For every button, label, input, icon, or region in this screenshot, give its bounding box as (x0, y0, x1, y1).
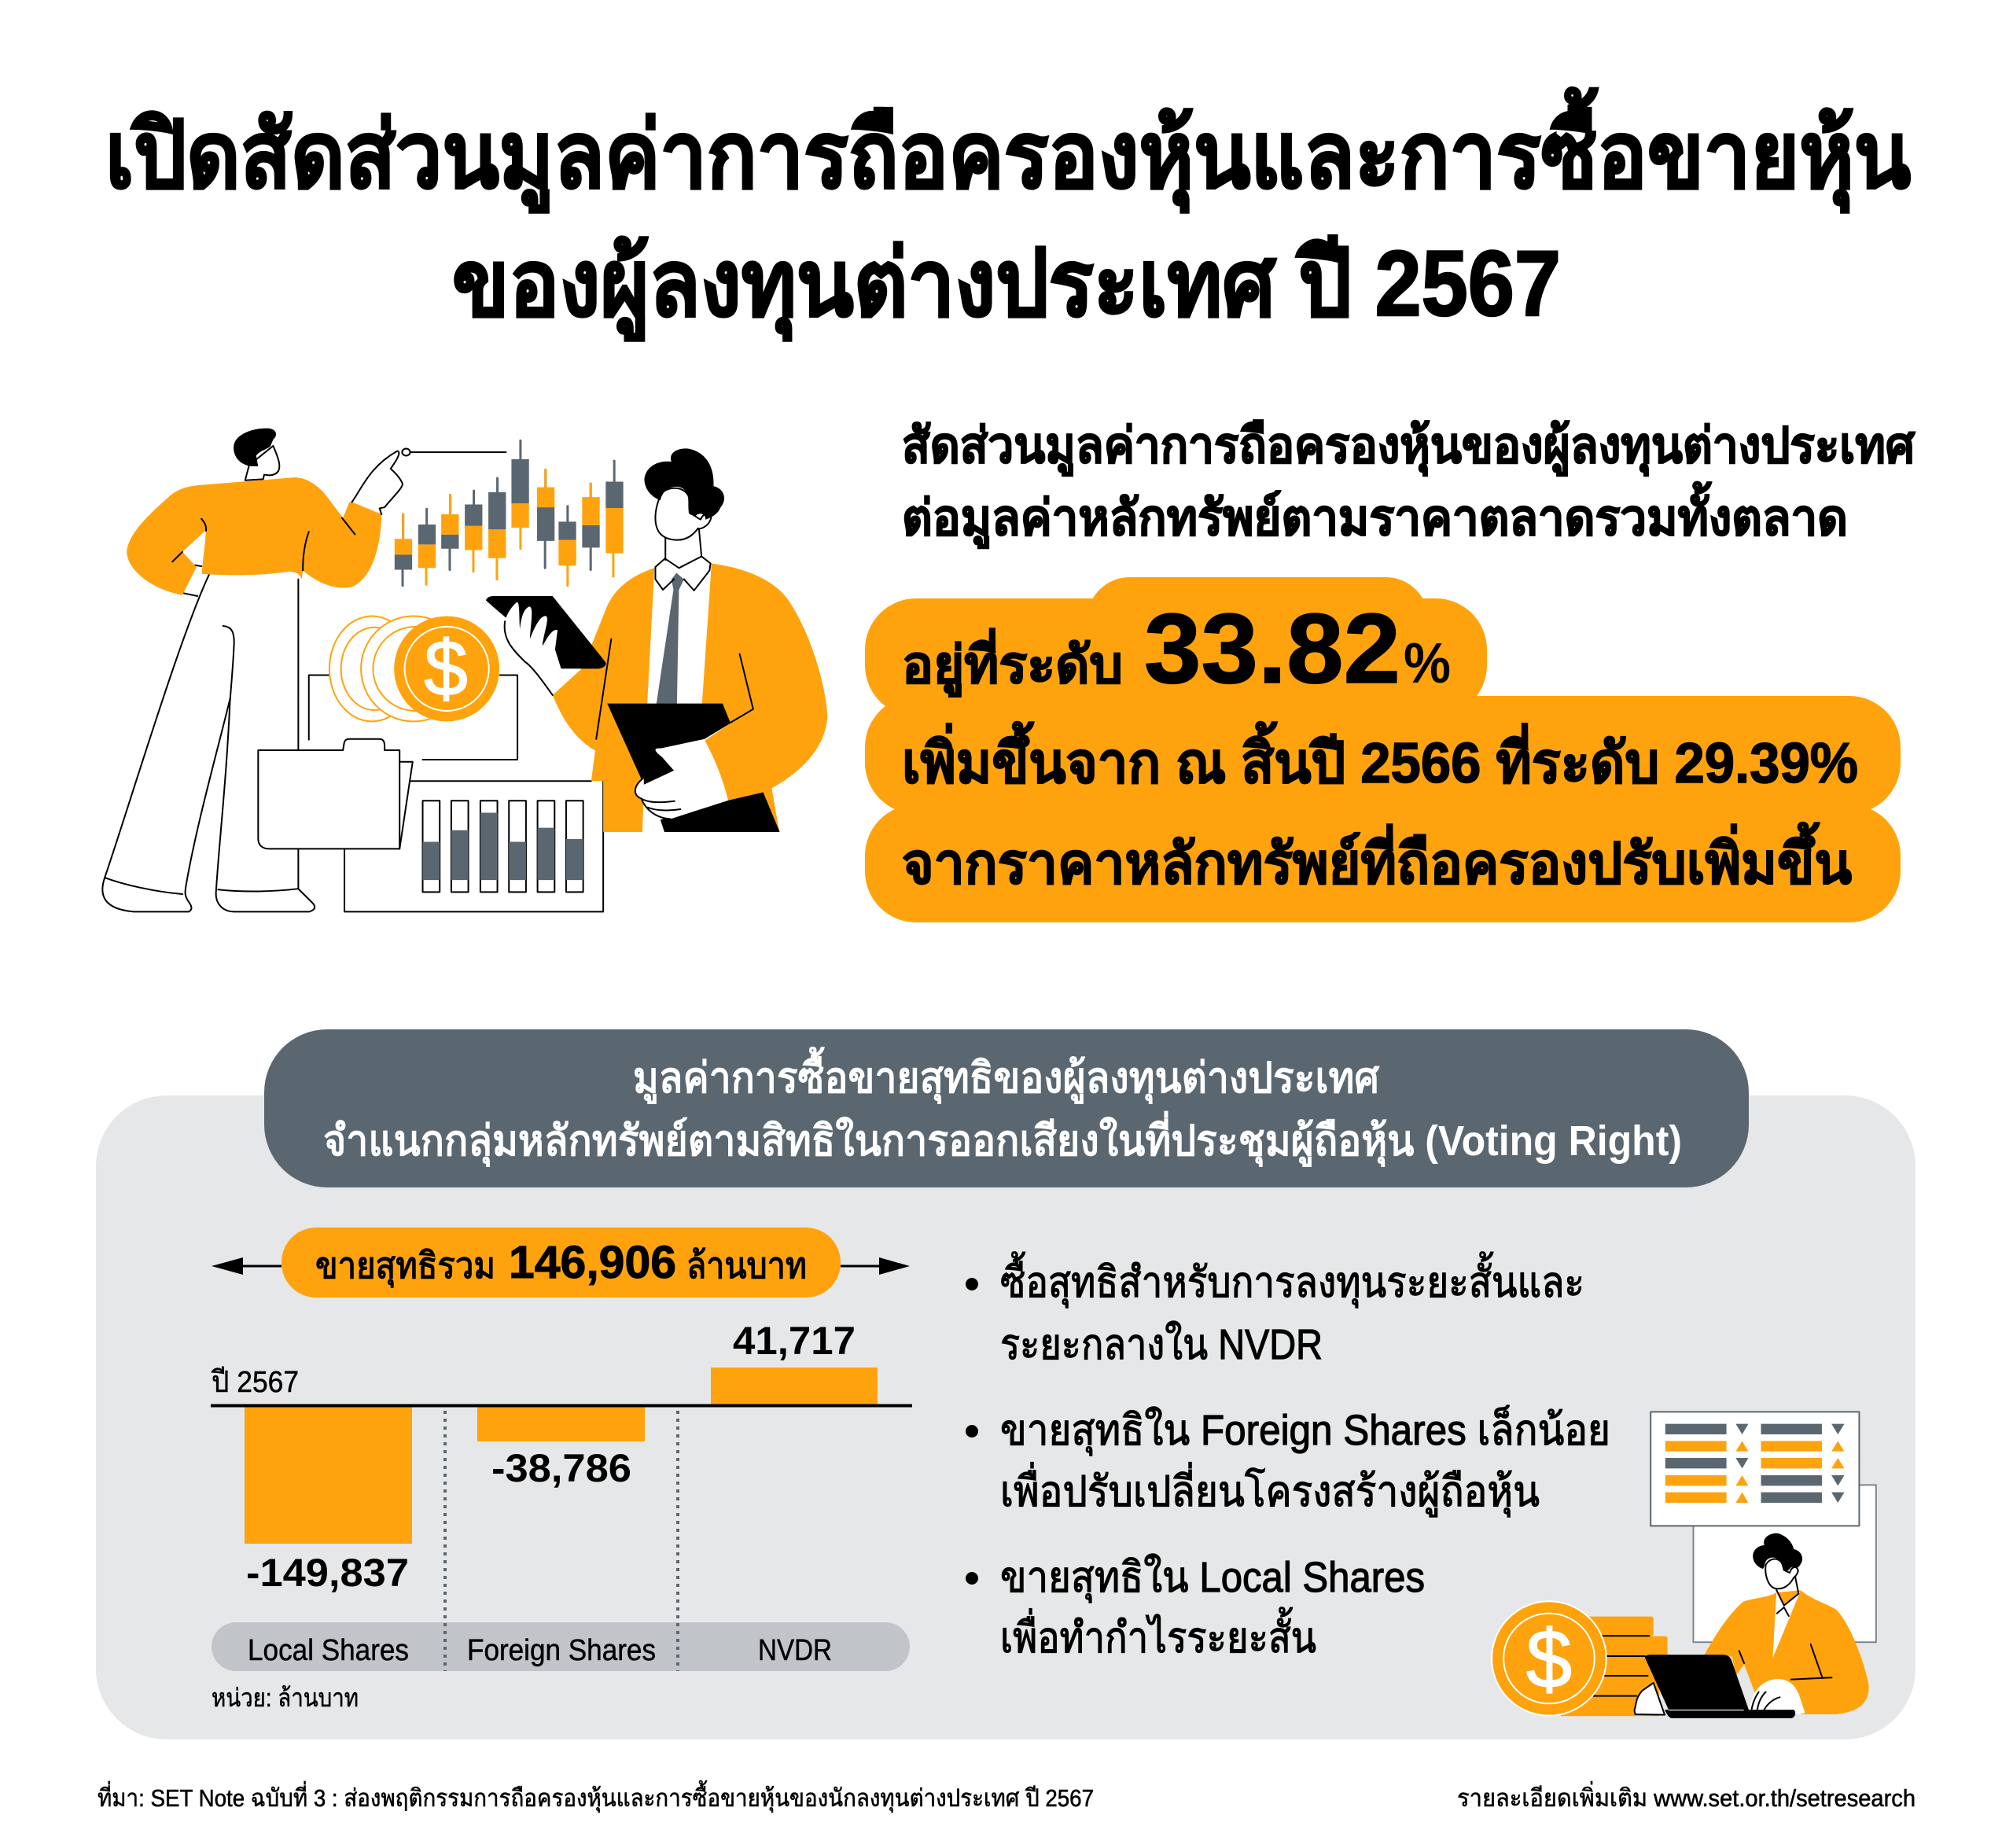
bullet list: ขายสุทธิใน Foreign Shares เล็กน้อย (1000, 1405, 1610, 1456)
callout: orange highlight block: เพิ่มขึ้นจาก ณ สิ้นปี 2566 ที่ระดับ 29.39% (902, 721, 1858, 795)
title: ของผู้ลงทุนต่างประเทศ ปี 2567 (452, 232, 1561, 341)
callout: orange highlight block (865, 577, 1901, 922)
bar chart (211, 1319, 912, 1671)
bar chart: -149,837 (246, 1551, 409, 1595)
callout: orange highlight block: จากราคาหลักทรัพย์ที่ถือครองปรับเพิ่มขึ้น (902, 822, 1852, 896)
bar chart: -38,786 (491, 1446, 631, 1490)
unit note: หน่วย: ล้านบาท (212, 1684, 359, 1712)
illustration: two investors with candlestick chart (102, 429, 827, 911)
total net sell pill with arrows: 146,906 (509, 1237, 676, 1288)
subheading: foreign holding share (902, 418, 1915, 549)
bar chart: 41,717 (733, 1319, 856, 1363)
total net sell pill with arrows (212, 1228, 910, 1298)
subheading: foreign holding share: ต่อมูลค่าหลักทรัพย์ตามราคาตลาดรวมทั้งตลาด (902, 481, 1848, 549)
illustration: two investors with candlestick chart: $ (424, 624, 468, 712)
bar chart: Local Shares (248, 1634, 409, 1667)
bar chart: NVDR (758, 1634, 832, 1667)
bar chart: ปี 2567 (211, 1366, 299, 1399)
bullet list: เพื่อทำกำไรระยะสั้น (1000, 1607, 1316, 1662)
callout: orange highlight block: 33.82 (1144, 593, 1400, 704)
bullet list: เพื่อปรับเปลี่ยนโครงสร้างผู้ถือหุ้น (1000, 1462, 1540, 1518)
bullet list: ซื้อสุทธิสำหรับการลงทุนระยะสั้นและ (1000, 1252, 1584, 1309)
total net sell pill with arrows: ขายสุทธิรวม (315, 1245, 495, 1288)
bullet list: ระยะกลางใน NVDR (1000, 1320, 1323, 1368)
panel: net trading value (96, 1095, 1915, 1739)
footer: website: รายละเอียดเพิ่มเติม www.set.or.th/setresearch (1457, 1781, 1915, 1812)
bar chart: Foreign Shares (467, 1634, 656, 1667)
footer: source: ที่มา: SET Note ฉบับที่ 3 : ส่องพฤติกรรมการถือครองหุ้นและการซื้อขายหุ้นของนักลงทุนต่างประเทศ ปี 2567 (98, 1780, 1094, 1813)
bullet list: ขายสุทธิใน Local Shares (1000, 1553, 1425, 1603)
panel heading pill (264, 1029, 1749, 1187)
callout: orange highlight block: อยู่ที่ระดับ (902, 628, 1123, 698)
title (105, 87, 1911, 341)
illustration: analyst at laptop with coins and data board (1492, 1412, 1876, 1718)
total net sell pill with arrows: ล้านบาท (686, 1245, 807, 1286)
callout: orange highlight block: % (1404, 632, 1451, 695)
panel heading pill: มูลค่าการซื้อขายสุทธิของผู้ลงทุนต่างประเทศ (633, 1047, 1380, 1105)
bullet list (966, 1252, 1610, 1662)
illustration: analyst at laptop with coins and data board: $ (1526, 1614, 1572, 1706)
panel heading pill: จำแนกกลุ่มหลักทรัพย์ตามสิทธิในการออกเสียงในที่ประชุมผู้ถือหุ้น (Voting Right) (323, 1110, 1682, 1168)
subheading: foreign holding share: สัดส่วนมูลค่าการถือครองหุ้นของผู้ลงทุนต่างประเทศ (902, 418, 1915, 477)
